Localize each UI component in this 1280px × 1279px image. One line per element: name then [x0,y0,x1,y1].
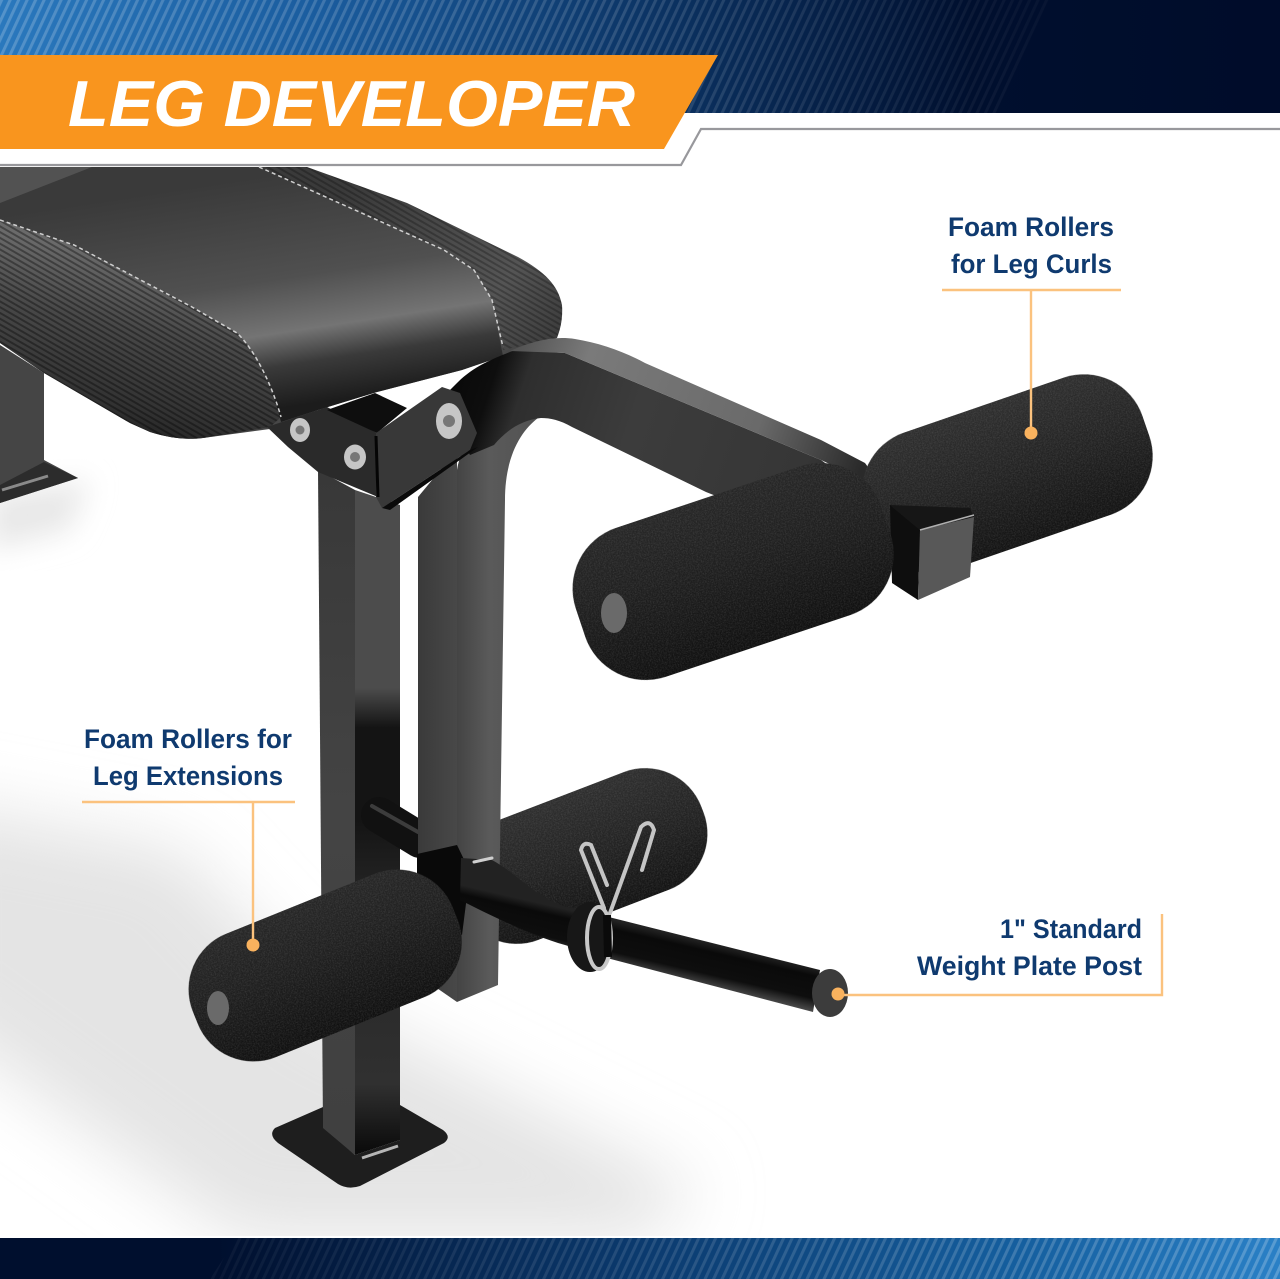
spring clip [581,823,654,913]
callout text [948,212,1114,279]
roller end cap [601,593,627,633]
seat stitching [0,167,503,417]
callout text: for Leg Curls [951,249,1112,279]
left bench leg [0,345,78,503]
floor shadow [0,480,1280,1279]
curved lever arm [440,338,890,565]
callout text: Foam Rollers for [84,724,292,754]
title: LEG DEVELOPER [68,67,635,140]
callout text: 1" Standard [1000,914,1142,944]
footer band [0,1238,1280,1279]
callout: foam rollers for leg extensions [82,724,295,952]
pivot bracket [267,387,478,510]
front upper foam roller [556,446,911,697]
callout text: Leg Extensions [93,761,283,791]
bench with leg developer attachment [0,167,1169,1188]
header white ribbon [0,113,1280,165]
callout: foam rollers for leg curls [942,212,1121,440]
callout: weight plate post [832,914,1162,1000]
collar [567,902,613,972]
roller end cap [207,991,229,1025]
base plate [272,1105,448,1188]
title banner [0,55,718,149]
seat pad [0,167,562,439]
vertical post [318,470,400,1155]
rear upper foam roller [845,357,1169,590]
callout text: Foam Rollers [948,212,1114,242]
small rear rod [372,806,420,840]
header band [0,0,1280,113]
callout text [917,914,1142,981]
rear lower foam roller [437,751,725,961]
weight plate post [460,823,848,1017]
square end block [890,505,974,600]
post end cap [812,969,848,1017]
front lower foam roller [170,851,480,1080]
callout text [84,724,292,791]
callout text: Weight Plate Post [917,951,1142,981]
upright frame [417,418,538,1002]
